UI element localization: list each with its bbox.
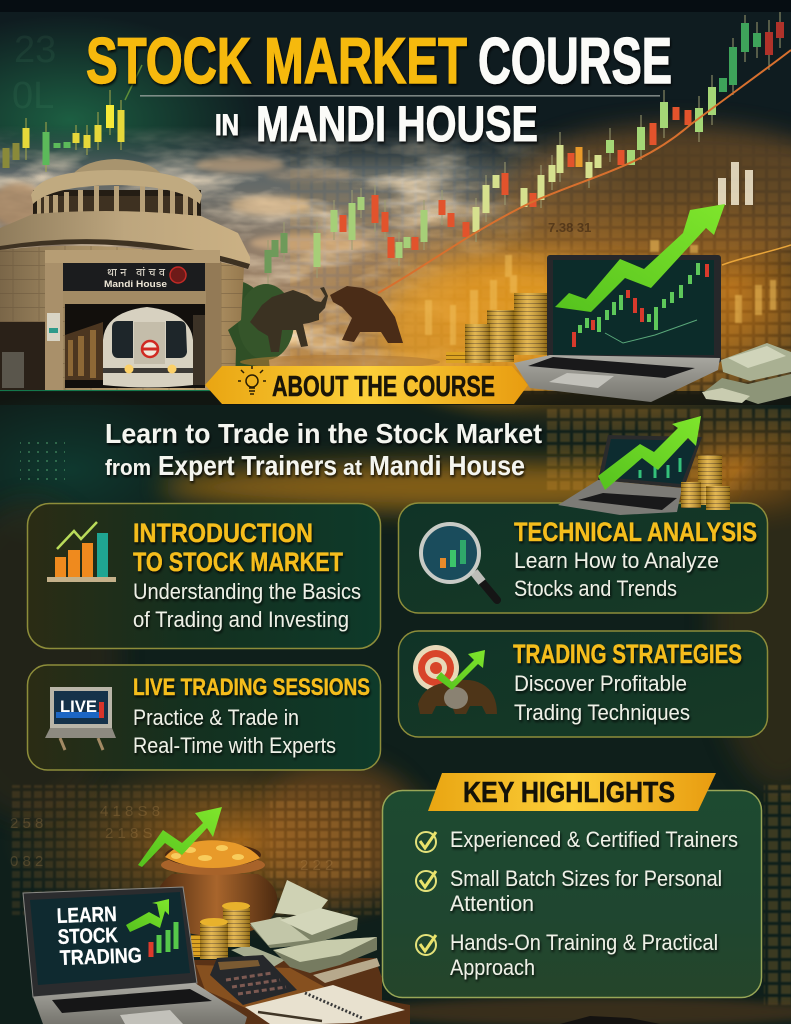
background: 23 xyxy=(14,29,56,71)
title line: stock market course: STOCK MARKET xyxy=(86,24,467,97)
metro sign: थान वांचव xyxy=(107,266,166,279)
banner: about the course xyxy=(205,366,528,404)
notebook xyxy=(245,985,405,1024)
dome xyxy=(72,159,162,175)
background: 7.38 31 xyxy=(548,220,591,235)
illustration: laptop with rising arrow xyxy=(514,204,725,402)
lower wall xyxy=(0,246,244,390)
rising green arrow xyxy=(555,204,725,312)
money stacks xyxy=(231,880,380,983)
highlight: small batches xyxy=(416,866,722,916)
coin stacks xyxy=(191,902,250,959)
heading: learn to trade: Learn to Trade in the Stock Market xyxy=(105,418,542,449)
highlight: experienced trainers: Experienced & Certified Trainers xyxy=(450,827,738,852)
highlight: small batches: Small Batch Sizes for Personal xyxy=(450,866,722,891)
candlestick chart: left green and yellow xyxy=(6,65,142,172)
background: 2 2 2 xyxy=(300,857,333,874)
bull xyxy=(250,287,328,352)
panel: live trading sessions: Real-Time with Experts xyxy=(133,733,336,758)
metro sign: Mandi House xyxy=(104,279,167,290)
panel: introduction to stock market: Understanding the Basics xyxy=(133,579,361,604)
title line: in mandi house: IN xyxy=(215,109,239,142)
heading: learn to trade: at xyxy=(343,455,363,480)
laptop screen text: STOCK xyxy=(57,924,118,949)
icon: pot of gold xyxy=(156,840,277,936)
trend lines xyxy=(378,50,791,293)
illustration: green trees behind station xyxy=(214,279,294,370)
laptop screen text: LEARN xyxy=(56,903,117,928)
heading: learn to trade: Expert Trainers xyxy=(158,450,337,481)
panel: technical analysis: Learn How to Analyze xyxy=(514,548,719,573)
metro train xyxy=(103,307,193,388)
upper drum ring xyxy=(0,211,250,264)
title xyxy=(86,24,672,152)
title line: in mandi house: MANDI HOUSE xyxy=(256,96,538,152)
icon: live monitor xyxy=(45,687,116,750)
highlight: hands-on: Approach xyxy=(450,955,535,980)
background: 0 8 2 xyxy=(10,853,43,870)
illustration: small laptop with coins xyxy=(558,416,730,515)
illustration: money bundle top xyxy=(702,343,791,404)
heading: learn to trade xyxy=(105,418,542,481)
background: 0L xyxy=(12,75,54,117)
panel: technical analysis: Stocks and Trends xyxy=(514,576,677,601)
banner: about the course: ABOUT THE COURSE xyxy=(272,371,495,403)
panel: trading strategies: Discover Profitable xyxy=(514,671,687,696)
icon: target and bear xyxy=(413,645,497,714)
rising green arrow xyxy=(138,807,222,867)
title line: stock market course: COURSE xyxy=(478,24,672,97)
icon: bar chart xyxy=(47,522,116,582)
illustration: desk scene xyxy=(23,807,410,1024)
icon: light bulb xyxy=(238,366,266,394)
heading: learn to trade: Mandi House xyxy=(369,450,525,481)
banner: key highlights: KEY HIGHLIGHTS xyxy=(463,777,675,809)
panel: introduction to stock market: TO STOCK MARKET xyxy=(133,547,343,577)
panel: introduction to stock market xyxy=(28,504,380,648)
heading: learn to trade: from xyxy=(105,455,151,480)
panel: technical analysis xyxy=(398,503,768,613)
icon: live monitor: LIVE xyxy=(60,697,97,716)
icon: magnifier xyxy=(421,524,497,600)
panel: live trading sessions xyxy=(28,665,380,770)
panel: introduction to stock market: INTRODUCTION xyxy=(133,518,313,548)
panel: trading strategies: Trading Techniques xyxy=(514,700,690,725)
illustration: gold coin stacks xyxy=(446,293,547,363)
highlight: small batches: Attention xyxy=(450,891,534,916)
panel: trading strategies xyxy=(398,631,768,737)
decoration: bottom silhouette xyxy=(560,1016,660,1024)
laptop screen text xyxy=(56,903,142,970)
background: 2 5 8 xyxy=(10,815,43,832)
candlestick chart: rising main xyxy=(268,12,780,285)
highlight: hands-on: Hands-On Training & Practical xyxy=(450,930,718,955)
panel: live trading sessions: Practice & Trade in xyxy=(133,705,299,730)
panel: key highlights xyxy=(382,773,762,998)
illustration: metro station building xyxy=(0,159,250,390)
laptop screen text: TRADING xyxy=(59,944,142,970)
calculator xyxy=(210,955,297,1005)
bear xyxy=(330,286,403,343)
illustration: bull and bear silhouettes xyxy=(240,286,440,369)
panel: introduction to stock market: of Trading and Investing xyxy=(133,607,349,632)
background: 4 1 8 S 8 xyxy=(100,803,160,820)
highlight: hands-on xyxy=(416,930,718,980)
laptop xyxy=(23,887,247,1024)
background: 2 1 8 S xyxy=(105,825,153,842)
metro sign xyxy=(63,263,205,291)
panel: live trading sessions: LIVE TRADING SESSIONS xyxy=(133,674,370,701)
